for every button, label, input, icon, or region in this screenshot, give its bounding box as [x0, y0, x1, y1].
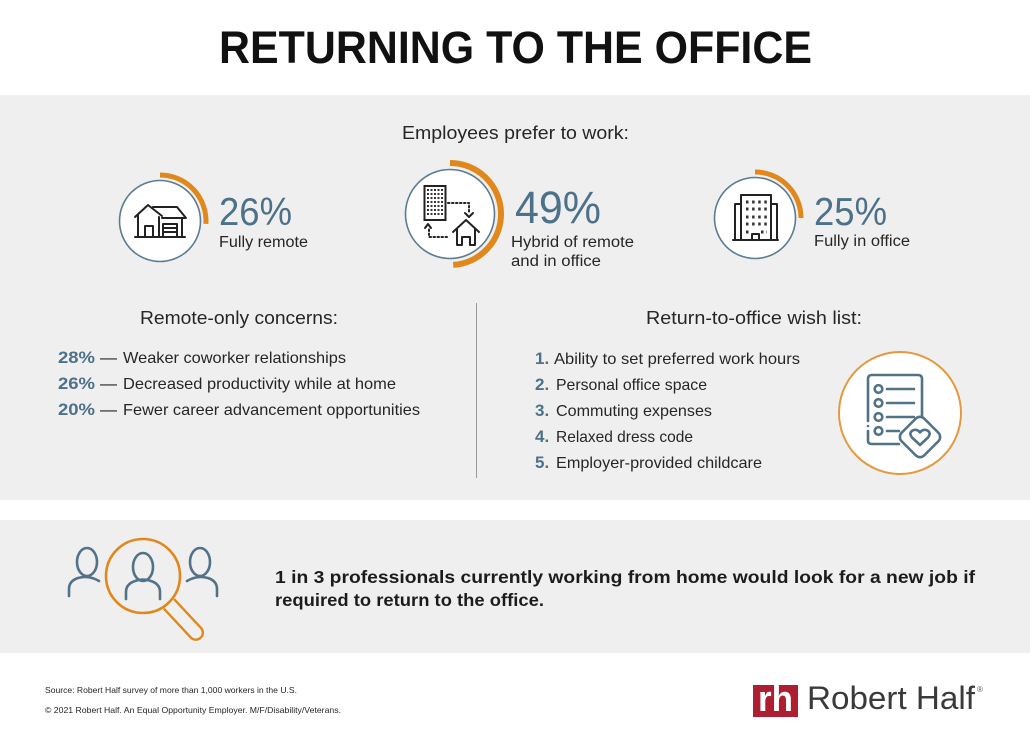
wish 1: Ability to set preferred work hours — [554, 351, 800, 368]
label: fully remote: Fully remote — [219, 234, 308, 251]
concern: 28%: 28% — [58, 348, 95, 367]
stat: hybrid 49% — [406, 163, 634, 270]
wish 5: Employer-provided childcare — [556, 455, 762, 472]
section: return-to-office wish list — [535, 307, 961, 474]
concern: 20%: Fewer career advancement opportunities — [123, 402, 420, 419]
heading: wish list: Return-to-office wish list: — [646, 307, 862, 328]
concern: 26%: Decreased productivity while at home — [123, 376, 396, 393]
concern: 26%: — — [100, 375, 118, 393]
wish 1: 1. — [535, 349, 549, 368]
icon: checklist with heart — [839, 352, 961, 474]
wish 4: Relaxed dress code — [556, 429, 693, 446]
concern: 28%: — — [100, 349, 118, 367]
icon: office building in ring — [714, 172, 801, 258]
callout text: 1 in 3 professionals currently working from home would look for a new job if — [275, 567, 975, 587]
wish 4: 4. — [535, 427, 549, 446]
callout text — [275, 567, 975, 610]
title: RETURNING TO THE OFFICE — [219, 22, 812, 73]
label: fully in office: Fully in office — [814, 233, 910, 250]
logo: Robert Half — [753, 678, 983, 719]
wish 3: Commuting expenses — [556, 403, 712, 420]
stat: fully in office 25% — [714, 172, 910, 258]
logo: Robert Half: Robert Half — [807, 680, 975, 716]
value: 26%: 26% — [219, 191, 292, 234]
panel: callout band — [0, 520, 1030, 653]
source note: Source: Robert Half survey of more than 1,000 workers in the U.S. — [45, 685, 297, 695]
heading: remote-only concerns: Remote-only concerns: — [140, 307, 338, 328]
value: 49%: 49% — [515, 182, 601, 233]
section: remote-only concerns — [58, 307, 420, 419]
label: hybrid: Hybrid of remote — [511, 234, 634, 251]
icon: people and magnifier — [69, 539, 217, 643]
concern: 28% — [58, 348, 346, 367]
heading: employees prefer: Employees prefer to work: — [402, 122, 629, 143]
wish 2: 2. — [535, 375, 549, 394]
label: hybrid: and in office — [511, 253, 601, 270]
icon: office and home in ring — [406, 163, 501, 265]
concern: 20%: 20% — [58, 400, 95, 419]
concern: 26%: 26% — [58, 374, 95, 393]
callout text: required to return to the office. — [275, 590, 544, 610]
label: hybrid — [511, 234, 634, 270]
value: 25%: 25% — [814, 191, 887, 234]
wish 2: Personal office space — [556, 377, 707, 394]
wish 5: 5. — [535, 453, 549, 472]
logo: Robert Half: ® — [977, 685, 983, 694]
concern: 20%: — — [100, 401, 118, 419]
panel: work preferences and lists — [0, 95, 1030, 500]
logo: Robert Half: rh — [758, 678, 793, 719]
stat: fully remote 26% — [120, 175, 308, 262]
icon: house in ring — [120, 175, 206, 262]
wish 3: 3. — [535, 401, 549, 420]
copyright note: © 2021 Robert Half. An Equal Opportunity Employer. M/F/Disability/Veterans. — [45, 705, 341, 715]
concern: 28%: Weaker coworker relationships — [123, 350, 346, 367]
